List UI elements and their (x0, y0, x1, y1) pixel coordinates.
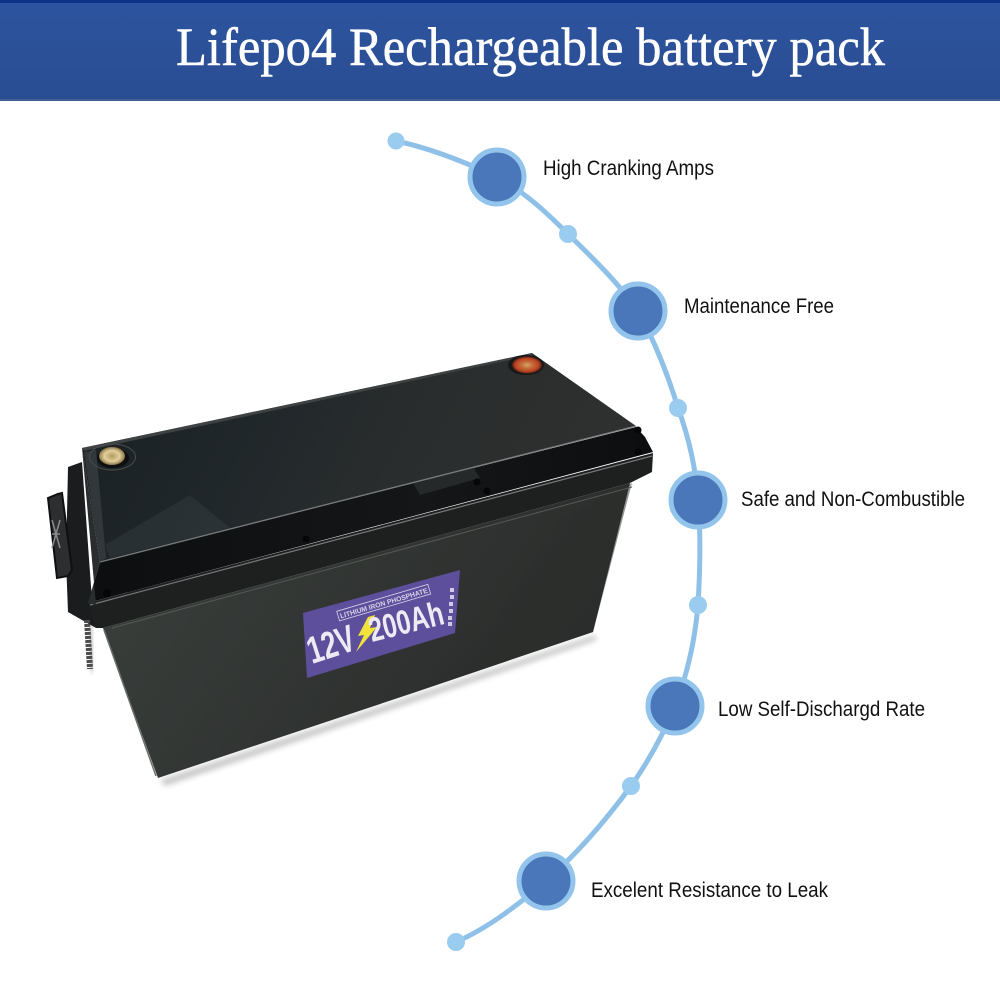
small node (447, 933, 465, 951)
label voltage text: 12V (302, 618, 361, 673)
timeline curve (388, 132, 707, 951)
label: Excelent Resistance to Leak (591, 879, 828, 902)
battery handle and strap (48, 462, 96, 672)
header banner (0, 0, 1000, 101)
label: High Cranking Amps (543, 157, 714, 180)
battery lower rim (88, 453, 653, 628)
label: Safe and Non-Combustible (741, 488, 965, 511)
label: Low Self-Dischargd Rate (718, 698, 925, 721)
purple battery label (302, 570, 460, 678)
small node (689, 596, 707, 614)
label side marks (448, 588, 454, 626)
feature: low self-discharge rate (648, 679, 925, 733)
small node (622, 777, 640, 795)
positive terminal (508, 355, 544, 375)
feature: resistance to leak (519, 854, 828, 908)
small node (559, 225, 577, 243)
negative terminal (90, 444, 136, 470)
feature: maintenance free (611, 284, 834, 338)
label heading: LITHIUM IRON PHOSPHATE (339, 588, 429, 620)
label: Maintenance Free (684, 295, 834, 318)
title: Lifepo4 Rechargeable battery pack (176, 17, 885, 77)
battery lid top (82, 353, 636, 562)
small node (669, 399, 687, 417)
small node (388, 132, 404, 150)
feature: safe and non-combustible (671, 473, 965, 527)
label capacity text: 200Ah (365, 595, 448, 650)
battery illustration (48, 353, 653, 786)
screw holes (103, 426, 642, 597)
label lightning bolt (356, 615, 377, 652)
battery body (103, 483, 630, 778)
feature: high cranking amps (470, 150, 714, 204)
